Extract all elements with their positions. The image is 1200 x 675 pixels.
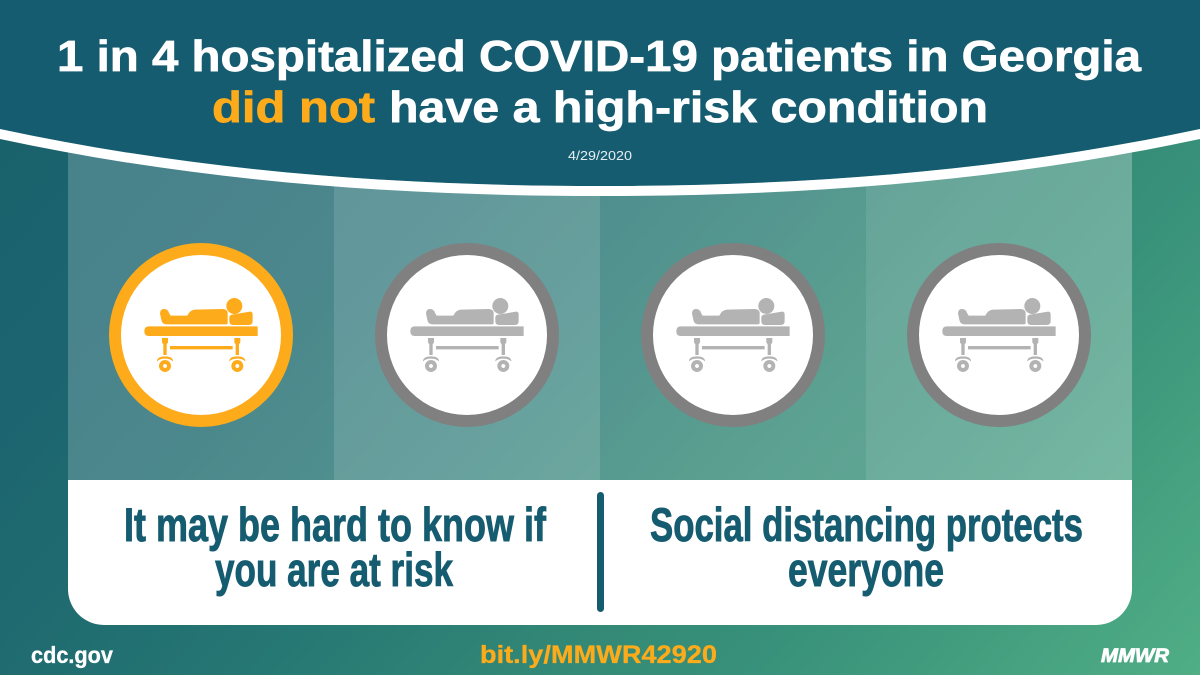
message: hard to know risk bbox=[124, 498, 546, 596]
footer: link: bit.ly/MMWR42920 bbox=[480, 641, 717, 669]
message: social distancing: everyone bbox=[788, 543, 944, 596]
footer: MMWR logo: MMWR bbox=[1101, 646, 1169, 667]
icon: patient on stretcher 3 bbox=[647, 249, 819, 421]
divider bbox=[597, 492, 604, 612]
title bbox=[57, 32, 1142, 132]
message: social distancing bbox=[650, 498, 1083, 596]
icon: patient on stretcher 4 bbox=[913, 249, 1085, 421]
footer: cdc.gov: cdc.gov bbox=[31, 642, 113, 668]
title: did not bbox=[212, 83, 375, 132]
title: 1 in 4 hospitalized COVID-19 patients in Georgia bbox=[57, 32, 1142, 81]
panel: column backgrounds bbox=[68, 130, 1132, 490]
date: 4/29/2020 bbox=[568, 149, 632, 163]
message: hard to know risk: you are at risk bbox=[215, 543, 454, 596]
icon: patient on stretcher 2 bbox=[381, 249, 553, 421]
icon: highlighted patient on stretcher bbox=[115, 249, 287, 421]
white curve under header bbox=[0, 129, 1200, 196]
title: have a high-risk condition bbox=[389, 83, 988, 132]
panel: message card bbox=[68, 480, 1132, 625]
message: hard to know risk: It may be hard to know if bbox=[124, 498, 546, 551]
header band bbox=[0, 0, 1200, 186]
